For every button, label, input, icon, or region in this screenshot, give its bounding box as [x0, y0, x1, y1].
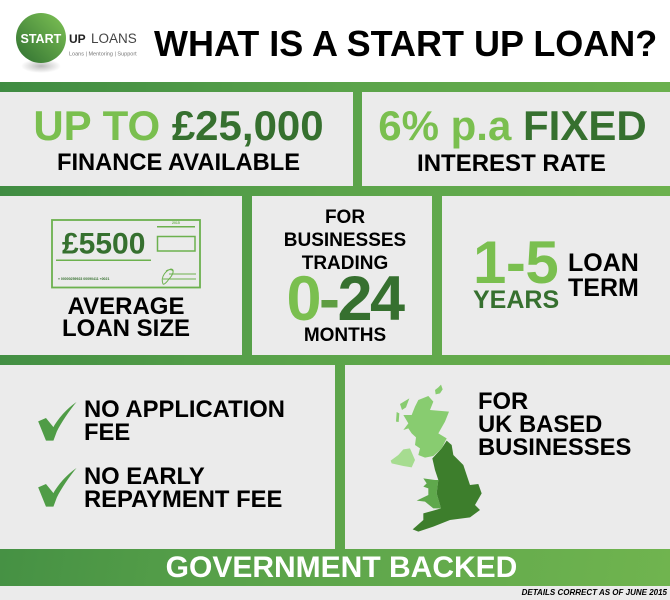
title: WHAT IS A START UP LOAN? — [154, 23, 657, 64]
no application fee: FEE — [84, 419, 130, 446]
no application fee: NO APPLICATION — [84, 396, 285, 423]
trading text: BUSINESSES — [284, 230, 406, 251]
Wales — [417, 478, 441, 508]
government backed banner: GOVERNMENT BACKED — [166, 551, 517, 584]
panel: interest rate — [362, 92, 670, 186]
panel: UK based — [345, 365, 670, 549]
logo: UP — [69, 32, 86, 46]
trading text: TRADING — [302, 253, 388, 274]
Scotland — [396, 385, 449, 458]
months: MONTHS — [304, 325, 386, 346]
loan term label — [568, 249, 639, 302]
trading text: FOR — [325, 207, 365, 228]
panel: finance available — [0, 92, 353, 186]
logo — [16, 13, 137, 72]
panel: loan term — [442, 196, 670, 355]
finance label: FINANCE AVAILABLE — [57, 150, 300, 176]
interest label: INTEREST RATE — [417, 150, 606, 177]
Northern Ireland — [391, 448, 415, 467]
no early repayment fee — [84, 463, 282, 513]
label: average loan size — [62, 293, 190, 342]
term figure: 1-5 — [473, 229, 558, 296]
panel: businesses trading — [252, 196, 432, 355]
logo: START — [20, 32, 62, 46]
label: average loan size: LOAN SIZE — [62, 315, 190, 342]
icon: cheque: « 00000259923 00090411 «0021 — [58, 277, 109, 281]
footnote: DETAILS CORRECT AS OF JUNE 2015 — [522, 588, 667, 597]
icon: cheque: 2015 — [172, 221, 180, 225]
years: YEARS — [473, 286, 559, 314]
UK based text — [478, 388, 631, 461]
UK based text: BUSINESSES — [478, 434, 631, 461]
no early repayment fee: NO EARLY — [84, 463, 205, 490]
icon: cheque — [51, 219, 201, 288]
no application fee — [84, 396, 285, 446]
logo: LOANS — [91, 31, 137, 46]
map: UK — [390, 384, 482, 532]
loan term label: LOAN — [568, 249, 639, 277]
finance amount: UP TO £25,000 — [33, 102, 324, 149]
UK based text: FOR — [478, 388, 528, 415]
interest figure: 6% p.a FIXED — [378, 102, 647, 149]
icon: check — [38, 468, 76, 507]
label: average loan size: AVERAGE — [68, 293, 184, 320]
icon: check — [38, 402, 76, 441]
England — [413, 441, 482, 532]
footer strip — [0, 586, 670, 600]
loan term label: TERM — [568, 274, 639, 302]
trading figure: 0-24 — [286, 264, 403, 334]
logo: Loans | Mentoring | Support — [69, 52, 137, 58]
UK based text: UK BASED — [478, 411, 602, 438]
icon: cheque: £5500 — [62, 228, 145, 260]
panel: average loan size — [0, 196, 242, 355]
trading text — [284, 207, 406, 274]
no early repayment fee: REPAYMENT FEE — [84, 486, 282, 513]
panel: fees — [0, 365, 335, 549]
